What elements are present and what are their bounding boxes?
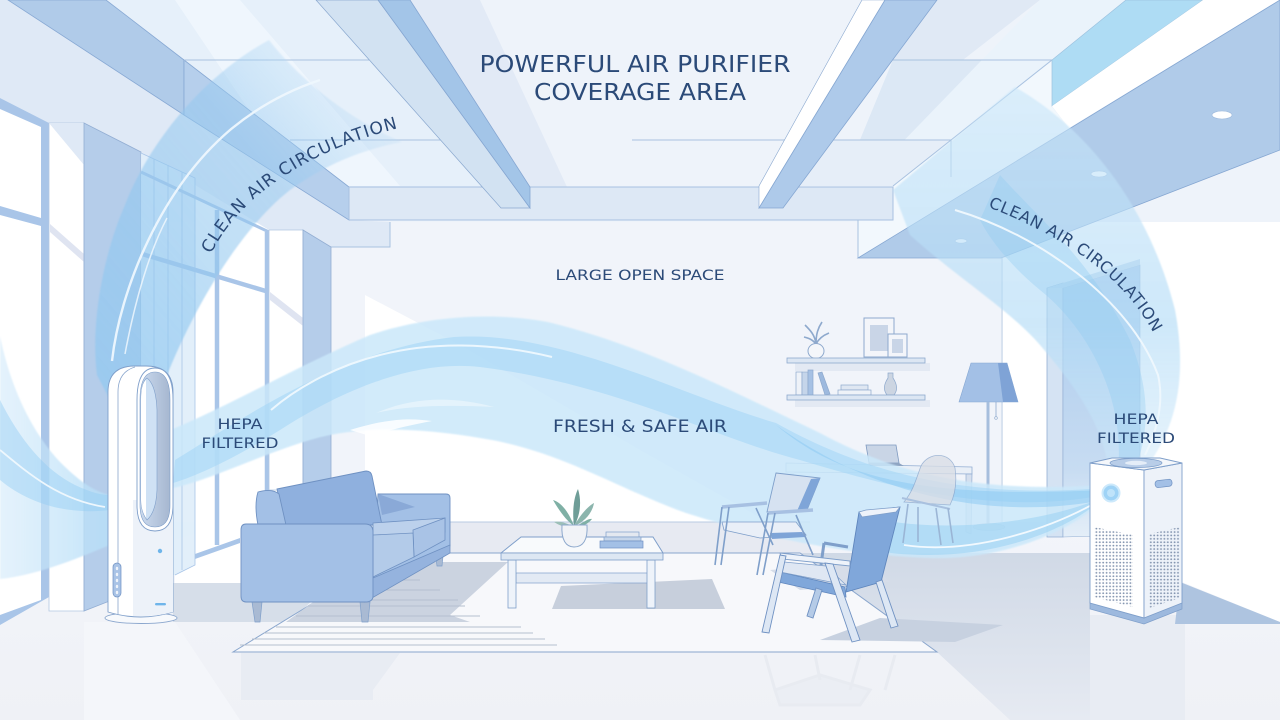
label: hepa filtered right: HEPA [1114, 412, 1159, 428]
air stream: far left wave [0, 336, 110, 579]
box air purifier [1090, 458, 1182, 624]
wall shelves [787, 318, 930, 407]
tower air purifier [105, 366, 177, 624]
armchair front [762, 507, 900, 642]
framed pictures [864, 318, 907, 357]
sofa [241, 471, 450, 622]
title: COVERAGE AREA [534, 78, 746, 106]
coffee table [501, 489, 663, 608]
floor [0, 520, 1280, 720]
floor lamp [959, 363, 1018, 530]
armchair back [715, 473, 820, 575]
icon: shelf plant [804, 322, 829, 358]
title [480, 50, 790, 106]
air stream: left arc [95, 40, 402, 400]
rug [233, 553, 1003, 652]
icon: potted plant [553, 489, 594, 547]
air stream: central wave ribbon [173, 317, 1104, 558]
left windows and pillars [0, 98, 331, 625]
air stream: right arc [893, 87, 1180, 480]
books and vase [796, 370, 897, 395]
label: large open space: LARGE OPEN SPACE [556, 268, 724, 284]
label: clean air circulation right: CLEAN AIR CIRCULATION [990, 198, 1163, 332]
floor reflections [241, 653, 895, 705]
ceiling beams [316, 0, 937, 220]
text curves [211, 128, 1156, 338]
desk with laptop [786, 445, 972, 534]
desk chair [902, 455, 956, 545]
label: fresh and safe air: FRESH & SAFE AIR [553, 417, 727, 436]
doorway on right wall [1047, 259, 1140, 537]
right ceiling soffit [858, 0, 1280, 258]
stacked books [600, 532, 643, 548]
title: POWERFUL AIR PURIFIER [480, 50, 790, 78]
label: hepa filtered right [1097, 412, 1175, 447]
label: hepa filtered left [202, 417, 278, 452]
label: hepa filtered right: FILTERED [1097, 431, 1175, 447]
ceiling [0, 0, 1280, 258]
label: hepa filtered left: FILTERED [202, 436, 278, 452]
label: hepa filtered left: HEPA [218, 417, 263, 433]
label: clean air circulation left: CLEAN AIR CIRCULATION [202, 116, 396, 252]
